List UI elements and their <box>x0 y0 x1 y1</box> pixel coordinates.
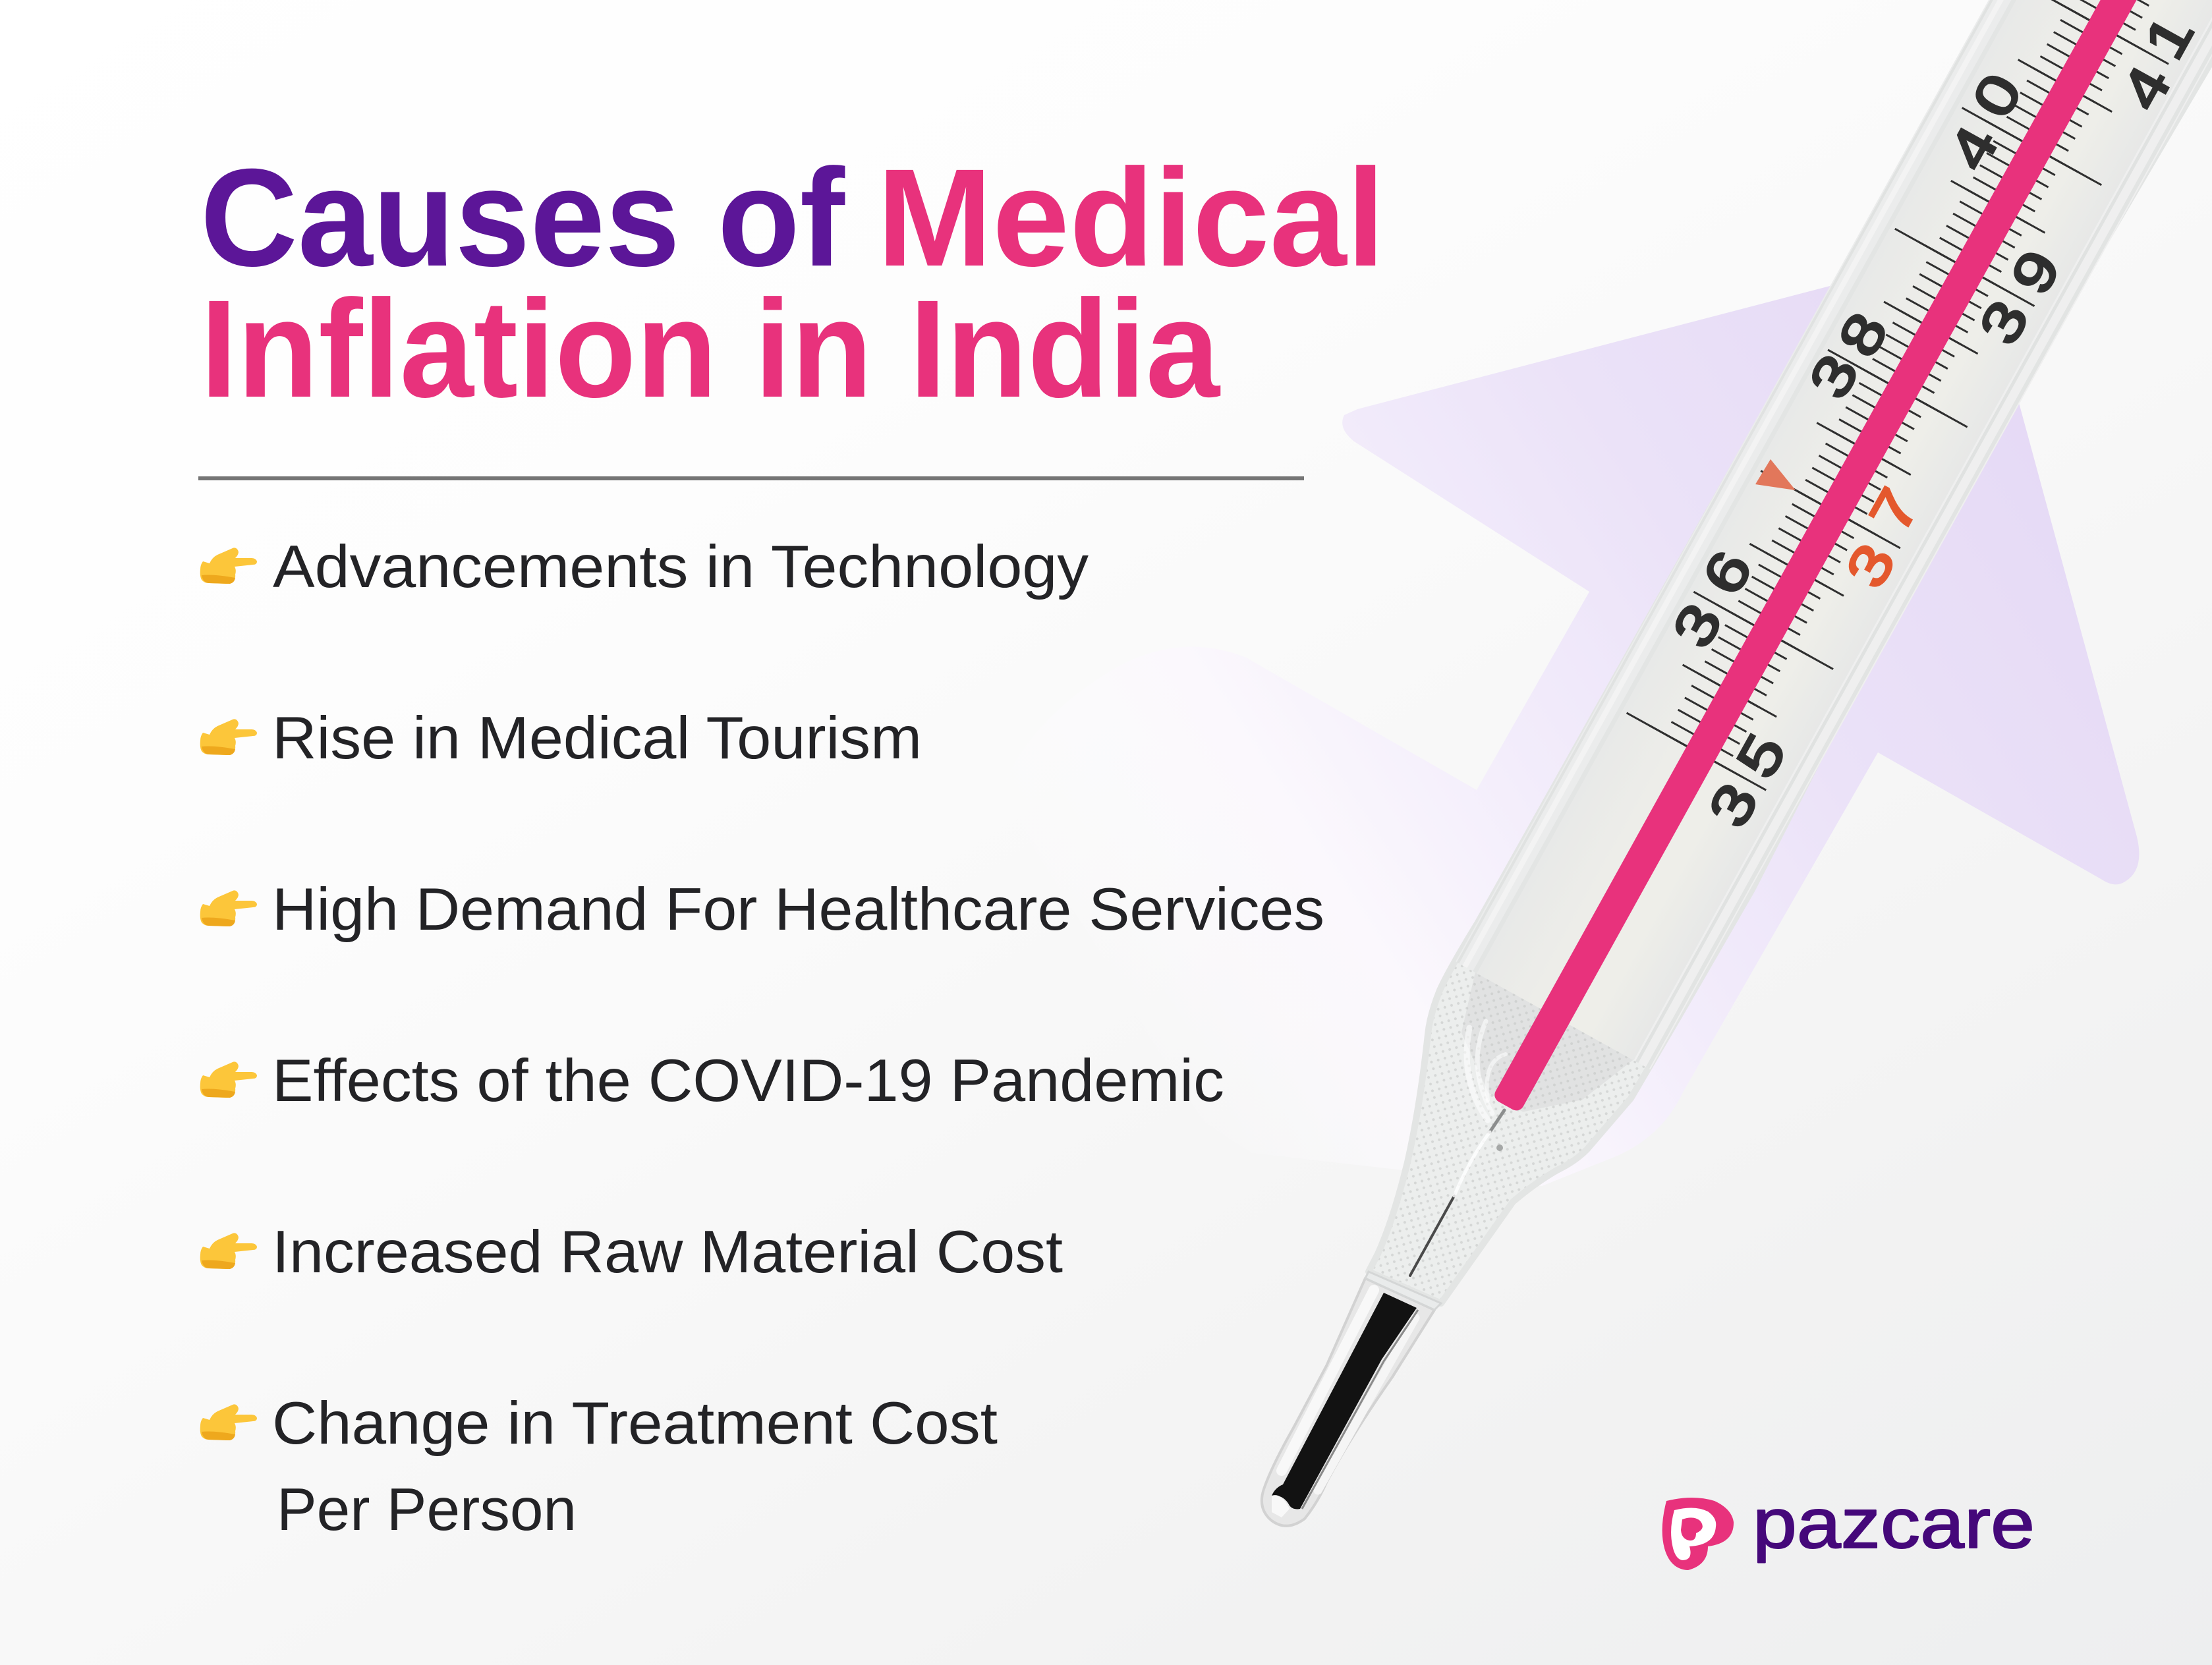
icon: pointing hand <box>200 548 257 584</box>
left glass band <box>1456 0 2100 973</box>
title word: Medical: Medical <box>877 140 1385 295</box>
item text: Advancements in Technology <box>273 534 1089 600</box>
number 41: 4 <box>2109 56 2183 120</box>
icon: pointing hand <box>200 1061 257 1098</box>
title line: Inflation in India: Inflation in India <box>200 271 1221 426</box>
number 35: 3 <box>1697 773 1771 837</box>
item text: Effects of the COVID-19 Pandemic <box>272 1048 1224 1114</box>
item 5 <box>200 1219 1063 1285</box>
bulb highlight <box>1272 1495 1290 1517</box>
number 40: 0 <box>1960 63 2034 128</box>
glass body <box>1369 0 2212 1303</box>
logo <box>1662 1483 2035 1570</box>
right glass band <box>1633 0 2212 1069</box>
item 6 <box>200 1390 998 1543</box>
icon: pointing hand <box>200 1233 257 1269</box>
number 39: 3 <box>1967 291 2041 354</box>
number 38: 3 <box>1797 345 1871 409</box>
icon: pointing hand <box>200 890 257 926</box>
number 38: 8 <box>1827 302 1900 367</box>
metal tip <box>1262 1278 1434 1526</box>
number 37 <box>1829 478 1937 598</box>
number 39 <box>1967 239 2073 356</box>
number 41 <box>2105 5 2210 120</box>
thermometer <box>1262 0 2212 1526</box>
list of causes <box>200 534 1324 1543</box>
thermometer scale, rotated along the axis <box>1407 0 2212 1156</box>
background arrow shape <box>988 248 2139 1186</box>
logo wordmark: pazcare <box>1753 1483 2035 1563</box>
item text, second line: Per Person <box>277 1477 577 1543</box>
item 2 <box>200 705 922 772</box>
item 4 <box>200 1048 1224 1114</box>
item text, first line: Change in Treatment Cost <box>272 1390 998 1457</box>
title <box>200 140 1385 426</box>
number 36: 6 <box>1691 541 1765 605</box>
collar <box>1365 1272 1441 1310</box>
fever marker triangle <box>1755 459 1796 490</box>
item text: Increased Raw Material Cost <box>272 1219 1063 1285</box>
paper scale backing <box>1477 0 2212 1060</box>
item text: High Demand For Healthcare Services <box>272 876 1324 943</box>
icon: pointing hand <box>200 719 257 755</box>
dark bulb reflection <box>1272 1293 1417 1509</box>
number 35 <box>1697 723 1798 837</box>
dotted shadow under the paper <box>1427 973 1633 1146</box>
number 41: 1 <box>2132 5 2206 69</box>
item 1 <box>200 534 1089 600</box>
number 36: 3 <box>1660 594 1734 658</box>
number 40: 4 <box>1937 116 2010 180</box>
bulb reflection edge <box>1302 1310 1418 1509</box>
number 40 <box>1933 63 2038 180</box>
capillary detail <box>1410 1021 1506 1276</box>
scale numbers <box>1592 0 2210 844</box>
mercury bar <box>1492 0 2190 1114</box>
number 37: 3 <box>1834 534 1908 598</box>
tick marks <box>1695 0 2174 752</box>
number 37: 7 <box>1858 478 1932 542</box>
number 39: 9 <box>1999 240 2073 304</box>
number 36 <box>1660 540 1765 658</box>
logo mark <box>1662 1498 1734 1570</box>
icon: pointing hand <box>200 1404 257 1440</box>
item 3 <box>200 876 1324 943</box>
item text: Rise in Medical Tourism <box>272 705 922 772</box>
number 38 <box>1797 300 1900 411</box>
title word: Causes of: Causes of <box>200 140 845 295</box>
number 35: 5 <box>1724 724 1798 788</box>
